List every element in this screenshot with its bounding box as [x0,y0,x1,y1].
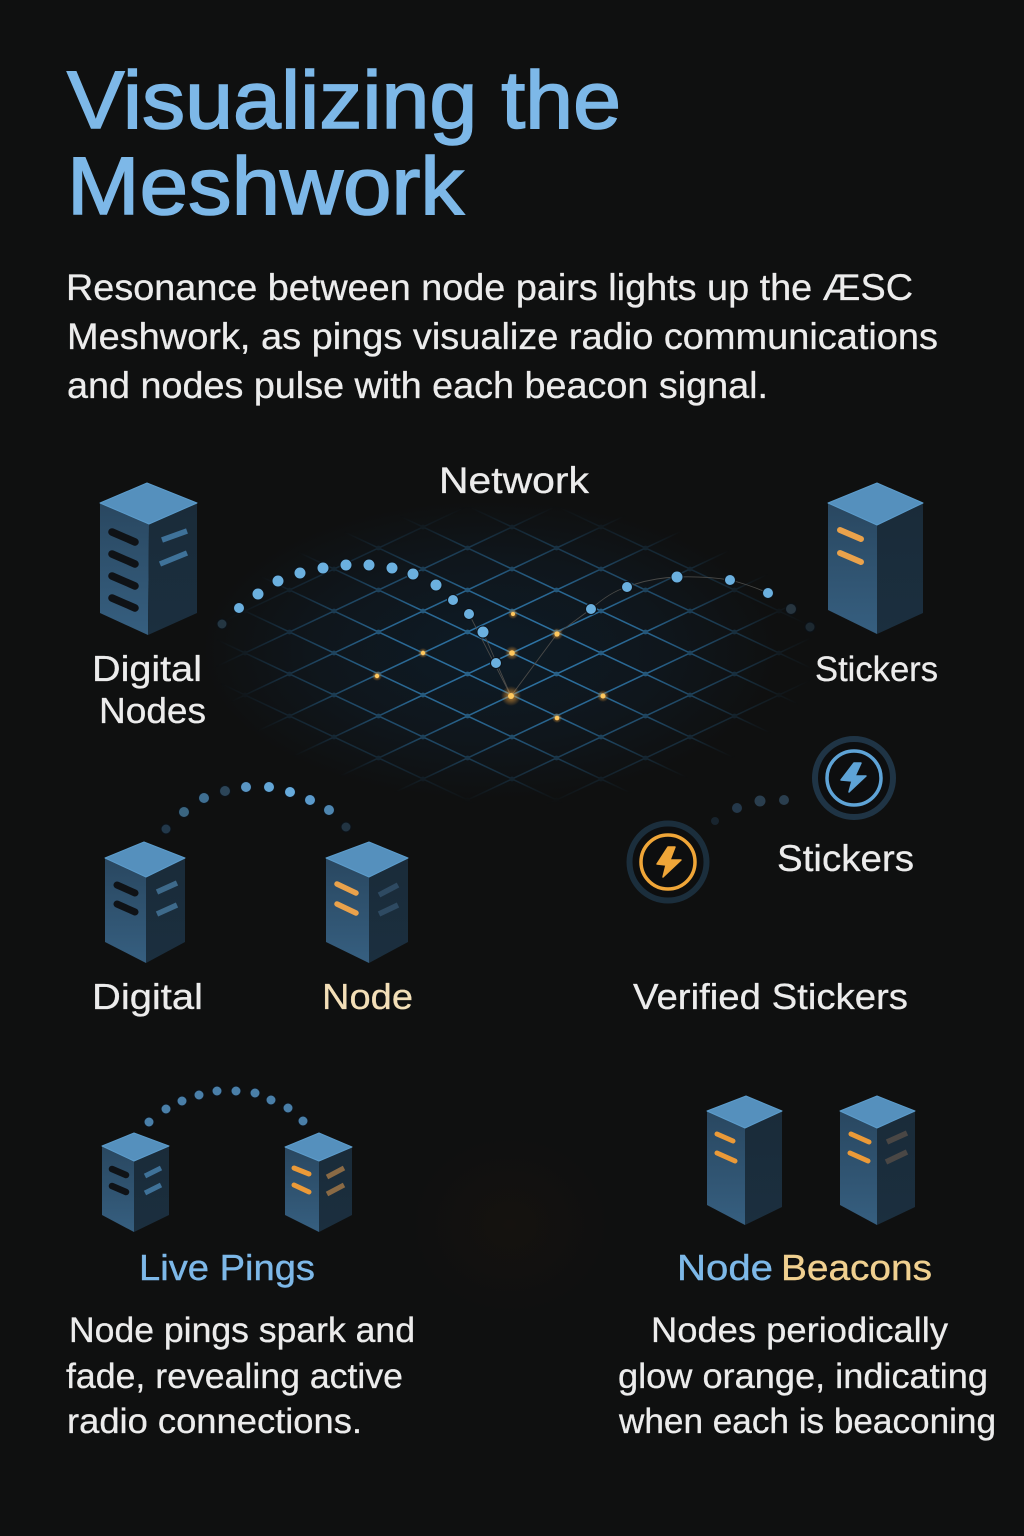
sticker icon: orange bolt [630,824,706,900]
server icon: live pings left [102,1133,169,1232]
text: live pings description: fade, revealing active [66,1356,403,1396]
text: node beacons description: glow orange, indicating [618,1356,988,1396]
label: verified stickers: Verified Stickers [633,976,908,1017]
text: live pings description: Node pings spark and [69,1310,415,1350]
label: stickers: Stickers [815,650,938,689]
intro text: Meshwork, as pings visualize radio communications [67,316,938,357]
signal arc: digital to node [161,782,351,834]
server icon: beacon left [707,1096,782,1225]
server icon: beacon right [840,1096,915,1225]
heading: network: Network [439,460,590,501]
title: Meshwork [67,141,465,232]
label: digital nodes [92,648,206,731]
label: stickers secondary: Stickers [777,838,914,879]
server icon: digital [105,842,185,963]
heading: live pings: Live Pings [139,1247,315,1288]
title: Visualizing the [67,55,621,146]
label: digital nodes: Digital [92,648,202,689]
intro text: and nodes pulse with each beacon signal. [67,365,768,406]
text: node beacons description [618,1310,996,1441]
heading: node beacons: Beacons [781,1247,932,1288]
sticker icon: blue bolt [815,739,893,817]
server icon: node [326,842,408,963]
signal arc: live pings [144,1086,308,1127]
text: node beacons description: when each is beaconing [618,1401,996,1441]
heading: node beacons: Node [677,1247,773,1288]
network mesh grid [226,511,799,797]
signal arc: network to stickers [586,571,815,632]
connection threads [469,577,768,696]
text: node beacons description: Nodes periodically [651,1310,948,1350]
glowing mesh nodes [372,609,609,723]
background glow: lower centre [400,1130,620,1320]
signal arc: digital nodes into network [217,559,502,668]
label: node: Node [322,976,413,1017]
text: live pings description [66,1310,415,1441]
label: digital: Digital [92,976,203,1017]
intro text [66,267,938,406]
label: digital nodes: Nodes [99,690,206,731]
server icon: stickers [828,483,923,634]
server icon: digital nodes [100,483,197,635]
heading: node beacons [677,1247,932,1288]
intro text: Resonance between node pairs lights up the ÆSC [66,267,913,308]
server icon: live pings right [285,1133,352,1232]
title [67,55,621,232]
text: live pings description: radio connections. [67,1401,362,1441]
signal arc: between stickers [711,795,789,825]
